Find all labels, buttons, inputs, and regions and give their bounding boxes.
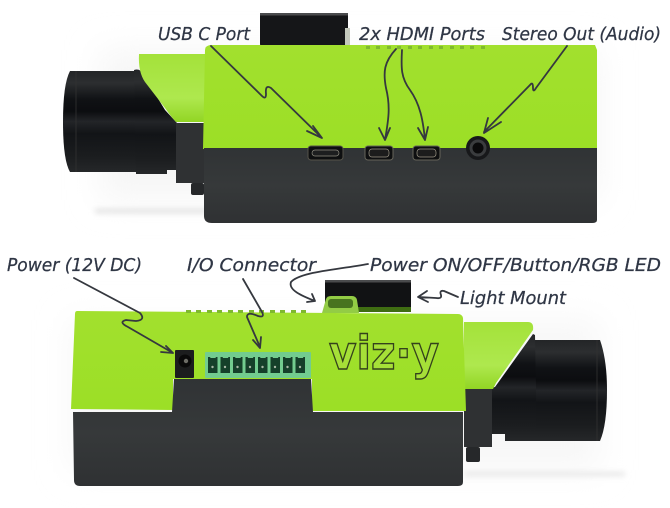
label: Power (12V DC): Power (12V DC) [7, 255, 142, 276]
lens hood (bottom) [464, 322, 533, 389]
panel: bottom camera view [71, 280, 607, 486]
port: stereo jack [466, 136, 490, 160]
green top housing (bottom) [71, 311, 466, 411]
port: USB C [308, 146, 343, 160]
lens hood (top) [139, 54, 206, 122]
arrow: HDMI port 2 [402, 50, 428, 140]
vent dots (bottom) [186, 310, 306, 313]
arrow: I/O connector [243, 279, 263, 348]
port: HDMI 1 [365, 146, 393, 160]
arrow: light mount [418, 291, 458, 302]
light mount (top) [260, 13, 350, 46]
label: USB C Port: USB C Port [158, 24, 251, 45]
label: I/O Connector: I/O Connector [187, 255, 318, 276]
label: 2x HDMI Ports: 2x HDMI Ports [359, 24, 485, 45]
label: Stereo Out (Audio): Stereo Out (Audio) [502, 24, 661, 45]
lens (bottom) [490, 334, 607, 441]
power jack 12V DC [175, 350, 194, 378]
label: Power ON/OFF/Button/RGB LED: Power ON/OFF/Button/RGB LED [370, 255, 661, 276]
arrow: power button [291, 264, 368, 302]
camera neck and foot (bottom) [464, 389, 492, 462]
panel: soft background shading [70, 50, 625, 476]
arrow: USB C port [211, 46, 322, 138]
panel: top camera view [63, 13, 597, 223]
power button / RGB LED [322, 296, 359, 313]
vent dots (top) [366, 46, 485, 49]
arrow: stereo out [484, 46, 567, 133]
black base (top) [204, 148, 597, 223]
arrow: power 12V DC [74, 278, 173, 353]
black base (bottom) [73, 379, 463, 486]
lens (top) [63, 70, 177, 174]
I/O connector terminal block [205, 352, 311, 378]
camera neck and foot (top) [176, 123, 205, 195]
light mount (bottom) [325, 280, 411, 312]
green top housing (top) [203, 45, 597, 149]
port: HDMI 2 [413, 146, 440, 160]
logo: viz·y: viz·y [329, 326, 439, 380]
label: Light Mount: Light Mount [460, 288, 567, 309]
arrow: HDMI port 1 [379, 49, 396, 140]
